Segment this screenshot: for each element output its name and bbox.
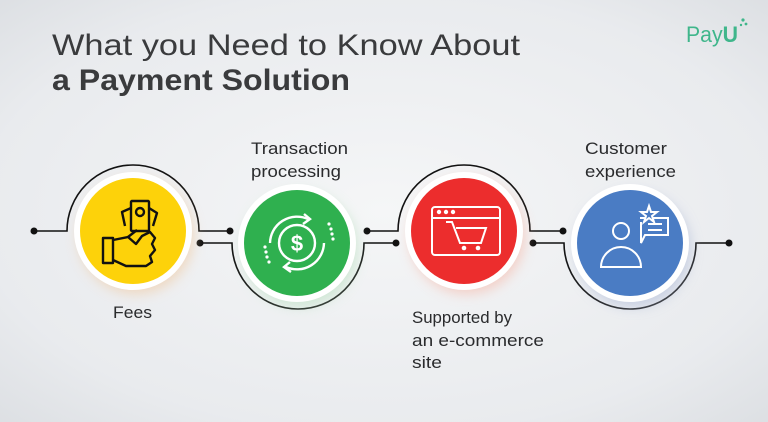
label: supported: [412, 309, 544, 372]
circle: customer experience: [571, 184, 691, 307]
label: customer experience: [585, 140, 676, 181]
label: customer experience: experience: [585, 163, 676, 181]
label: supported: Supported by: [412, 309, 513, 327]
label: supported: site: [412, 354, 442, 372]
label: supported: an e-commerce: [412, 332, 544, 350]
label: customer experience: Customer: [585, 140, 668, 158]
title: a Payment Solution: [52, 64, 350, 97]
circle: transaction processing: [238, 184, 358, 307]
circle: fees: [74, 172, 194, 294]
label: transaction processing: [251, 140, 348, 181]
logo: PayU: PayU: [686, 22, 738, 47]
label: transaction processing: processing: [251, 163, 341, 181]
circle: transaction processing: $: [291, 231, 303, 256]
icon: browser cart: [432, 207, 500, 255]
icon: hand with money: [103, 201, 157, 266]
connector lines: [34, 165, 729, 309]
icon: circular dollar: [270, 214, 324, 272]
icon: person with chat: [601, 206, 668, 267]
title: [52, 29, 521, 97]
title: What you Need to Know About: [52, 29, 521, 62]
label: fees: Fees: [113, 304, 152, 322]
label: transaction processing: Transaction: [251, 140, 348, 158]
circle: e-commerce: [405, 172, 525, 294]
